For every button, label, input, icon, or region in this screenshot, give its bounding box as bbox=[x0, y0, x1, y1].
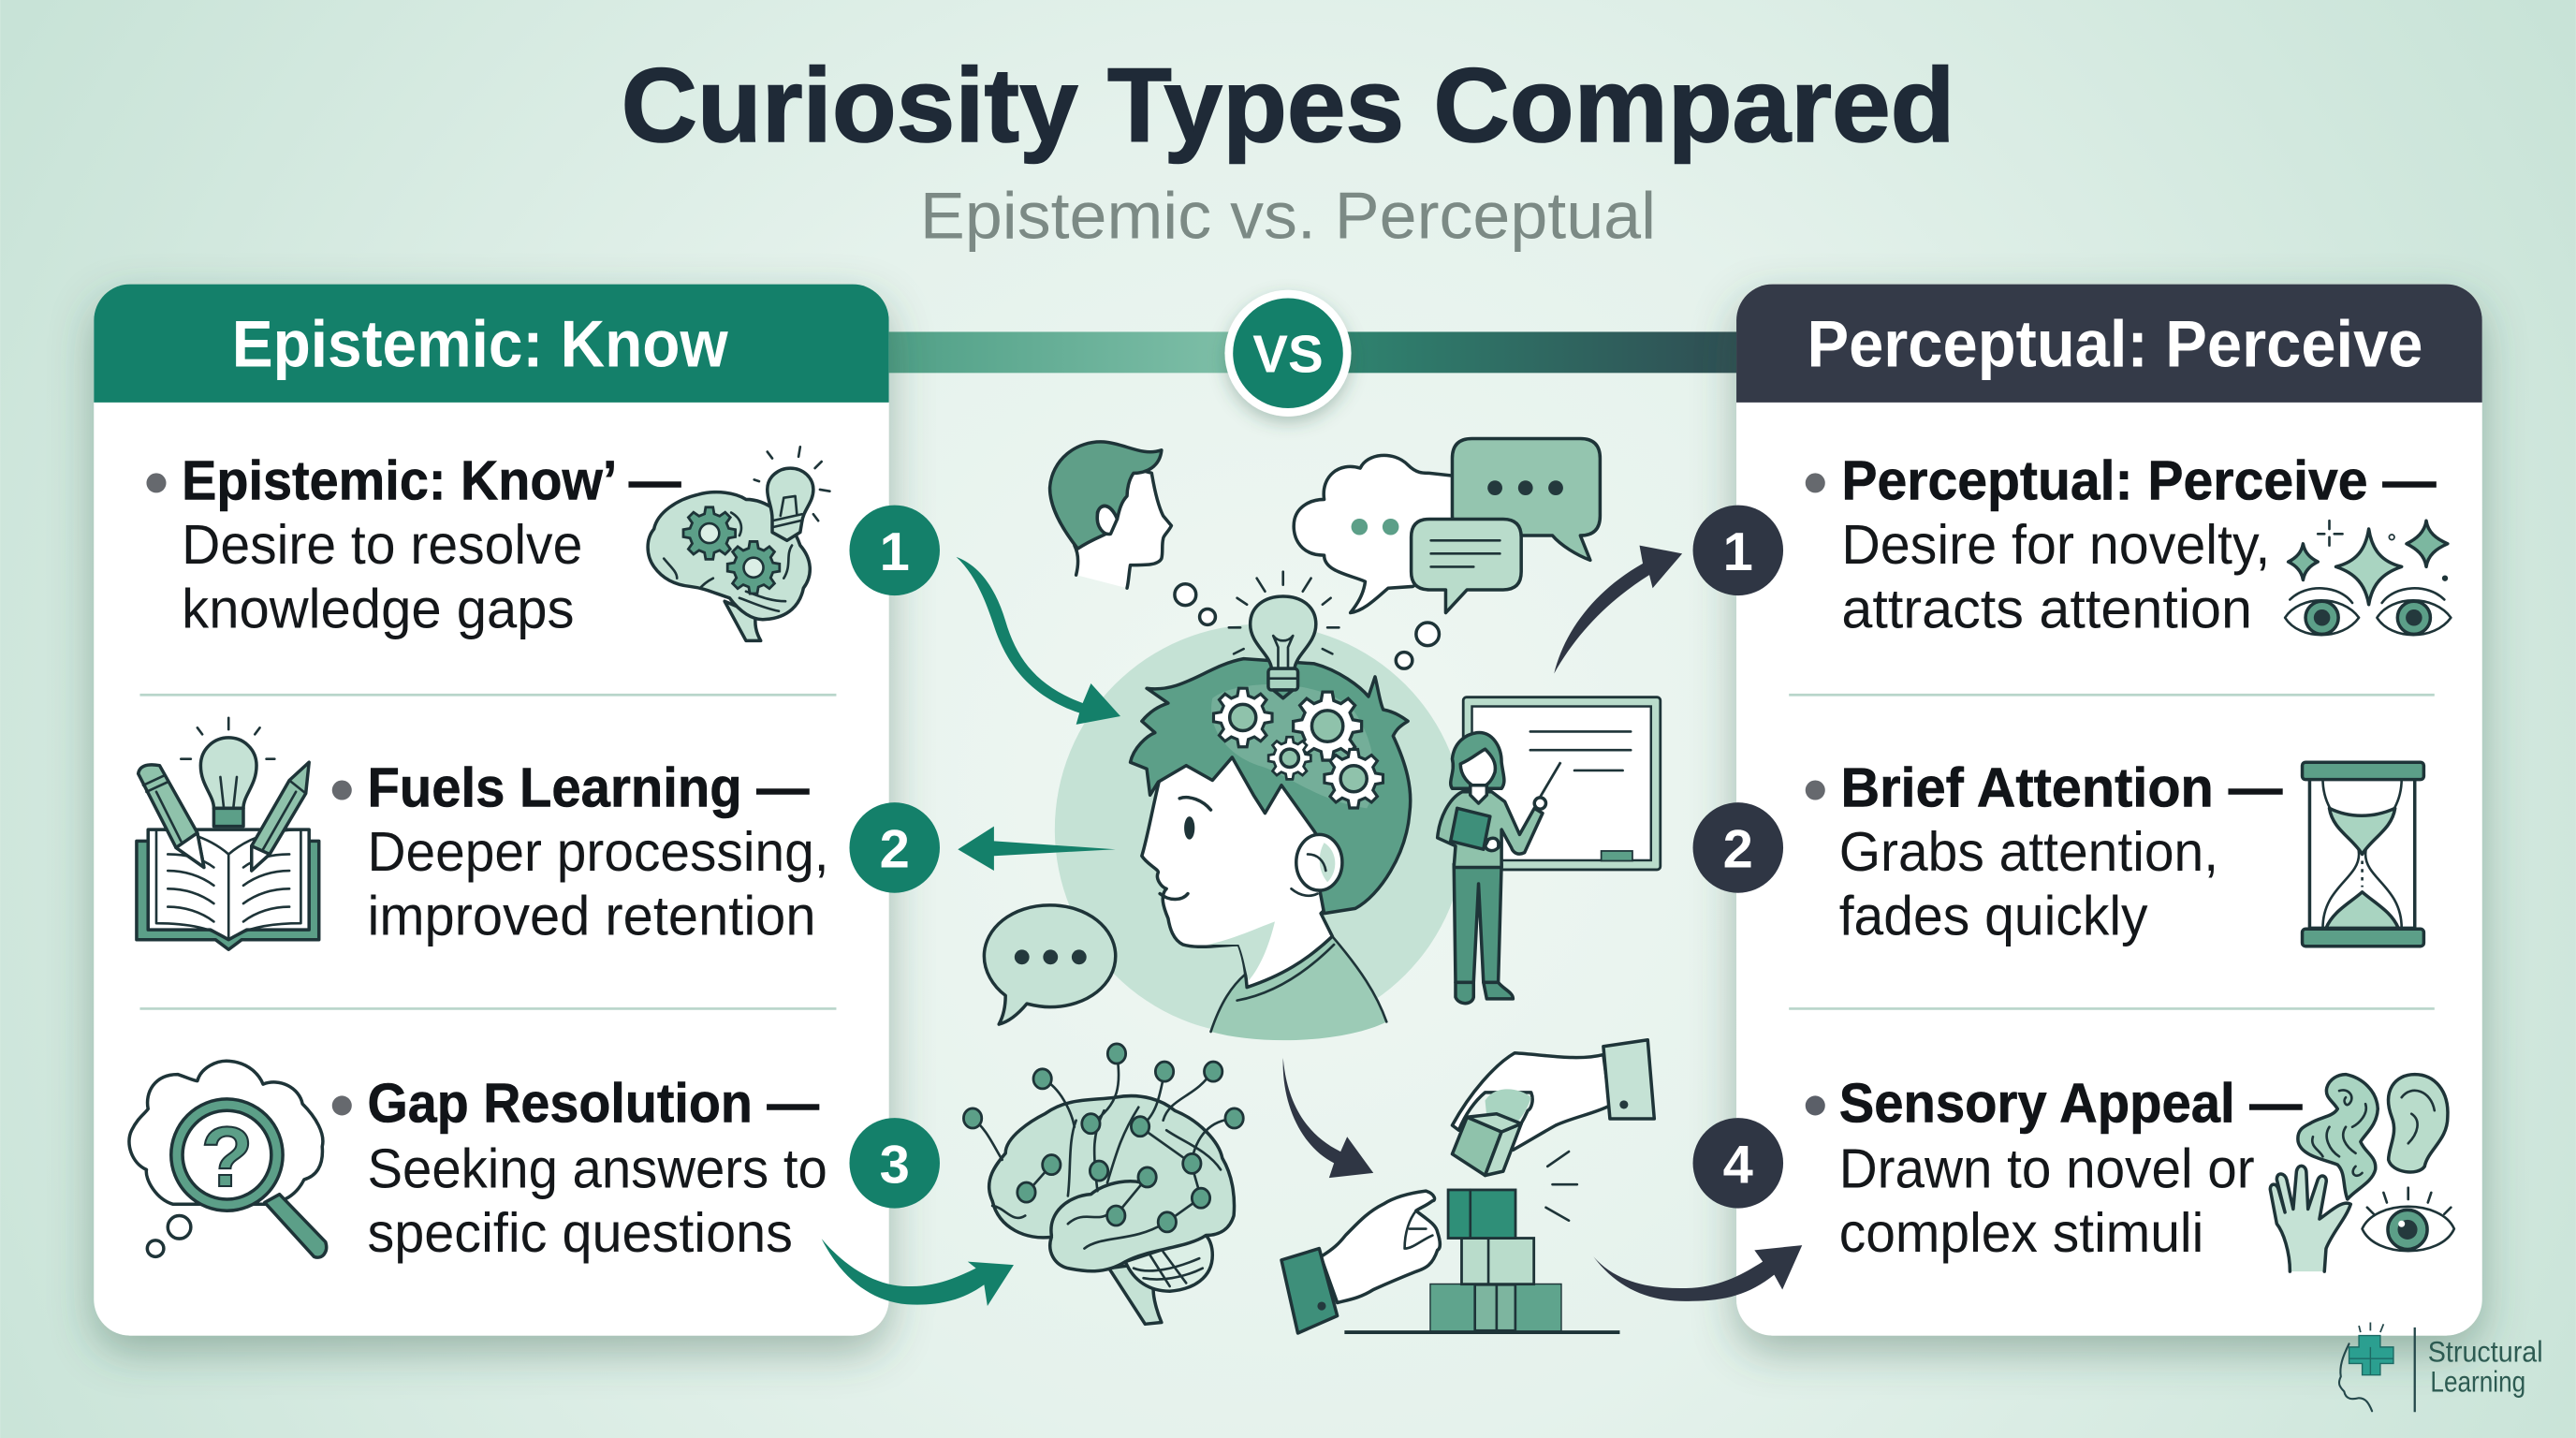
number badges: perceptual: 4 bbox=[1723, 1135, 1753, 1195]
perceptual item 1 text: Desire for novelty, bbox=[1841, 513, 2270, 576]
icon: small text bubble bbox=[1412, 519, 1521, 613]
icon: central light bulb bbox=[1175, 572, 1439, 698]
epistemic item 1 text: Desire to resolve bbox=[182, 513, 582, 576]
icon: sparkles and eyes bbox=[2285, 521, 2451, 635]
central illustration: student head bbox=[1055, 624, 1466, 1040]
number badges: perceptual: 2 bbox=[1723, 819, 1753, 879]
heading: epistemic: Epistemic: Know bbox=[232, 306, 728, 380]
arrow: student to epistemic 2 bbox=[958, 827, 1116, 871]
icon: neural network brain bbox=[963, 1044, 1243, 1324]
perceptual item 2 text: Brief Attention — bbox=[1840, 756, 2283, 819]
icon: hands stacking blocks bbox=[1281, 1040, 1654, 1333]
arrow: whiteboard to perceptual 1 bbox=[1554, 546, 1682, 673]
icon: magnifier with question in thought cloud bbox=[129, 1061, 327, 1257]
number badges: perceptual: 1 bbox=[1723, 522, 1753, 582]
icon: senses (smell, ear, touch, sight) bbox=[2270, 1075, 2454, 1271]
perceptual item 1 text: attracts attention bbox=[1841, 577, 2252, 639]
arrow: epistemic 3 to brain bbox=[822, 1239, 1014, 1306]
icon: hourglass bbox=[2303, 762, 2423, 946]
epistemic item 1 text bbox=[146, 448, 681, 639]
logo: Structural Learning: Structural bbox=[2428, 1335, 2543, 1369]
icon: thought cloud bbox=[1294, 455, 1458, 613]
arrow: blocks to perceptual 4 bbox=[1593, 1245, 1802, 1301]
panel: epistemic bbox=[94, 285, 889, 1336]
epistemic item 3 text: Gap Resolution — bbox=[367, 1071, 819, 1134]
perceptual item 3 text: complex stimuli bbox=[1839, 1201, 2203, 1264]
epistemic item 2 text: Fuels Learning — bbox=[367, 756, 810, 819]
epistemic item 3 text: Seeking answers to bbox=[367, 1137, 827, 1200]
heading: perceptual: Perceptual: Perceive bbox=[1807, 306, 2423, 380]
icon: green speech bubble bbox=[1452, 439, 1600, 560]
arrow: student to blocks bbox=[1283, 1058, 1373, 1178]
epistemic item 3 text bbox=[332, 1071, 827, 1264]
number badges: perceptual bbox=[1693, 506, 1783, 1209]
number badges: epistemic: 1 bbox=[880, 522, 910, 582]
arrow: epistemic 1 to student bbox=[957, 557, 1120, 725]
epistemic item 2 text: Deeper processing, bbox=[367, 820, 829, 883]
connector bar: right bbox=[1331, 331, 1749, 373]
title: Curiosity Types Compared bbox=[622, 46, 1954, 164]
panel header: perceptual bbox=[1736, 285, 2482, 403]
icon: adult head profile bbox=[1050, 442, 1171, 588]
logo: Structural Learning: Learning bbox=[2430, 1364, 2525, 1398]
perceptual item 3 text bbox=[1806, 1071, 2303, 1264]
icon: lower-left speech bubble bbox=[984, 905, 1116, 1024]
epistemic item 3 text: specific questions bbox=[367, 1201, 793, 1264]
vs badge bbox=[1224, 290, 1352, 417]
logo: Structural Learning bbox=[2339, 1323, 2543, 1412]
number badges: epistemic: 3 bbox=[880, 1135, 910, 1195]
number badges: epistemic bbox=[849, 506, 940, 1209]
epistemic item 1 text: Epistemic: Know’ — bbox=[182, 448, 681, 511]
icon: open book with pencils and bulb bbox=[137, 718, 319, 949]
perceptual item 2 text: fades quickly bbox=[1839, 884, 2148, 946]
epistemic item 2 text: improved retention bbox=[367, 884, 816, 946]
perceptual item 1 text bbox=[1806, 448, 2437, 639]
perceptual item 1 text: Perceptual: Perceive — bbox=[1841, 448, 2437, 511]
connector bar: left bbox=[879, 331, 1249, 373]
epistemic item 2 text bbox=[332, 756, 829, 946]
perceptual item 3 text: Sensory Appeal — bbox=[1839, 1071, 2303, 1134]
panel header: epistemic bbox=[94, 285, 889, 403]
number badges: epistemic: 2 bbox=[880, 819, 910, 879]
icon: brain with gears and bulb bbox=[648, 447, 829, 640]
subtitle: Epistemic vs. Perceptual bbox=[920, 178, 1656, 252]
perceptual item 2 text bbox=[1806, 756, 2283, 946]
icon: magnifier with question in thought cloud: ? bbox=[201, 1109, 253, 1205]
icon: teacher figure bbox=[1438, 732, 1560, 1004]
perceptual item 2 text: Grabs attention, bbox=[1839, 820, 2218, 883]
panel: perceptual bbox=[1736, 285, 2482, 1336]
epistemic item 1 text: knowledge gaps bbox=[182, 577, 575, 639]
vs badge: VS bbox=[1252, 324, 1324, 383]
icon: whiteboard bbox=[1463, 697, 1661, 870]
perceptual item 3 text: Drawn to novel or bbox=[1839, 1137, 2255, 1200]
